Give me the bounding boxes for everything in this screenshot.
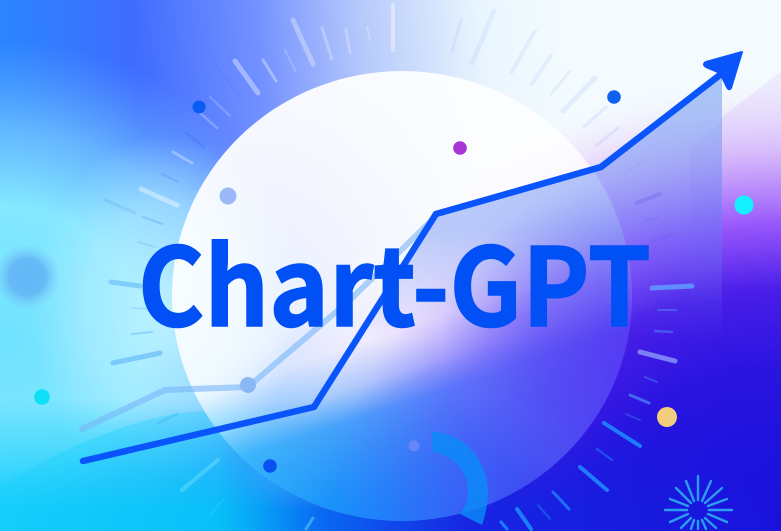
lower wave inside disc [200, 196, 632, 521]
partial ring arc [408, 432, 488, 525]
gauge ticks [105, 5, 618, 529]
decorative dots [34, 90, 753, 473]
main trend line with arrow [83, 52, 742, 461]
area fill under trend line [362, 73, 722, 340]
background ridge shape [690, 72, 781, 300]
outer right ticks [501, 161, 692, 529]
faint secondary trend line [82, 222, 430, 429]
central disc [172, 71, 632, 521]
title: Chart-GPT [138, 202, 651, 358]
blurred blue orb [0, 244, 60, 310]
icon: starburst [665, 476, 732, 529]
